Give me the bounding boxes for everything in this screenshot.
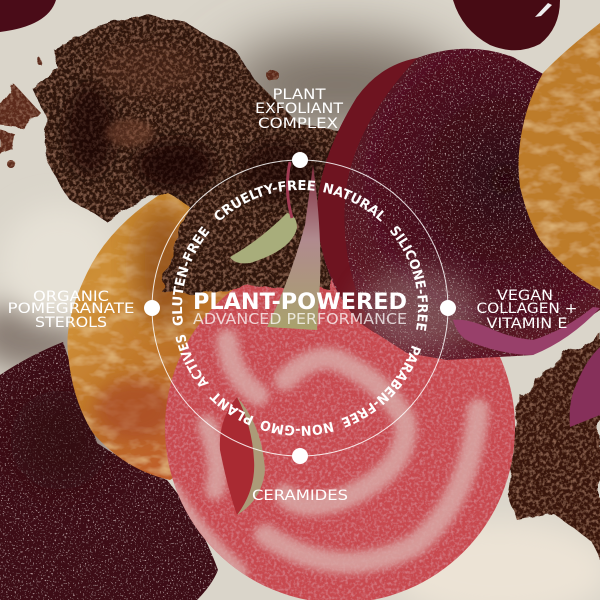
ring word: paraben-free: PARABEN-FREE (341, 346, 422, 428)
node: left (144, 300, 160, 316)
ring word: silicone-free: SILICONE-FREE (390, 226, 428, 331)
top beet slice (453, 0, 560, 50)
label: organic pomegranate sterols (8, 289, 134, 331)
label: vegan collagen + vitamin e: COLLAGEN + (476, 301, 578, 317)
label: vegan collagen + vitamin e (476, 288, 578, 332)
ring word: actives: ACTIVES (176, 334, 209, 387)
cocoa crumbs (0, 57, 278, 169)
ring line (152, 160, 448, 456)
label: plant exfoliant complex: COMPLEX (258, 116, 338, 132)
node: right (440, 300, 456, 316)
long purple leaf (453, 307, 600, 355)
circle diagram (144, 152, 456, 464)
label: ceramides: CERAMIDES (252, 488, 348, 504)
ring word: gluten-free: GLUTEN-FREE (172, 226, 210, 326)
label: plant exfoliant complex: EXFOLIANT (255, 101, 343, 117)
dark beet slice (317, 49, 600, 360)
pale spiral bands (172, 340, 478, 572)
label: organic pomegranate sterols: STEROLS (35, 315, 107, 331)
label: plant exfoliant complex: PLANT (272, 87, 326, 103)
label: organic pomegranate sterols: ORGANIC (33, 289, 109, 305)
bottom left dark beet (0, 342, 218, 600)
node: top (292, 152, 308, 168)
ring word: non-gmo: NON-GMO (260, 420, 334, 436)
beet sprout (220, 397, 265, 515)
node: bottom (292, 448, 308, 464)
label: organic pomegranate sterols: POMEGRANATE (8, 301, 134, 317)
ring word: plant: PLANT (209, 393, 254, 426)
label: vegan collagen + vitamin e: VITAMIN E (486, 316, 568, 332)
cocoa powder bottom right (507, 333, 600, 560)
peach slice (67, 193, 234, 480)
label: plant exfoliant complex (255, 87, 343, 132)
orange beet slice (518, 23, 600, 290)
label: vegan collagen + vitamin e: VEGAN (497, 288, 553, 304)
small purple leaf (570, 347, 600, 427)
green leaf with pink stem (230, 162, 297, 263)
center pink leaf (267, 165, 320, 330)
title: PLANT-POWERED (193, 290, 407, 315)
subtitle: ADVANCED PERFORMANCE (193, 310, 407, 328)
chioggia beet slice (165, 253, 515, 600)
ring word: cruelty-free: CRUELTY-FREE (214, 180, 316, 220)
cocoa powder main pile (32, 14, 340, 293)
ring word: natural: NATURAL (323, 182, 384, 222)
top left beet slice (0, 0, 56, 32)
